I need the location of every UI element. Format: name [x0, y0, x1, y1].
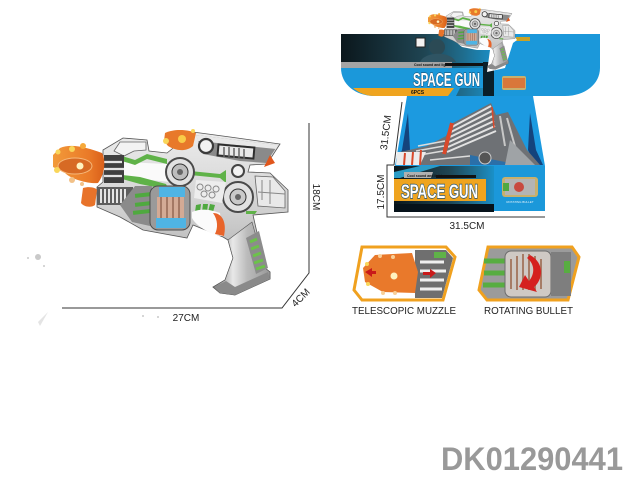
display box	[341, 7, 600, 212]
front title: SPACE GUN	[401, 182, 478, 203]
dust specks	[27, 254, 159, 326]
callout rotate arrow	[519, 255, 541, 292]
header background	[341, 34, 600, 96]
dimension lines: gun	[62, 123, 309, 308]
header grey band	[341, 62, 452, 68]
dimension lines: box	[387, 102, 545, 217]
callout frame	[479, 247, 579, 300]
header age badge	[516, 37, 530, 41]
stacked guns	[396, 103, 540, 165]
header logo	[416, 38, 425, 47]
front yellow band	[394, 179, 486, 201]
callout: rotating bullet	[479, 247, 579, 300]
callout: telescopic muzzle	[354, 247, 455, 300]
header astronaut	[420, 39, 456, 62]
front tagline	[404, 172, 476, 178]
front inset image	[502, 177, 538, 197]
callout rods	[483, 261, 505, 285]
dimension: box height: 17.5CM	[376, 174, 387, 210]
header title: SPACE GUN	[413, 70, 480, 90]
header dark panel	[341, 34, 494, 96]
header card	[341, 34, 600, 96]
callout muzzle	[363, 253, 418, 293]
callout label: rotating bullet: ROTATING BULLET	[484, 305, 574, 317]
mini gun on header	[427, 7, 517, 72]
callout label: telescopic muzzle: TELESCOPIC MUZZLE	[352, 305, 456, 317]
header small black label	[445, 63, 483, 66]
front tagline: Cool sound and light	[407, 174, 443, 178]
front inset caption: ROTATING BULLET	[506, 200, 534, 204]
product code: DK01290441	[441, 441, 623, 477]
dimension: 27CM: 27CM	[173, 313, 199, 324]
callout frame	[354, 247, 455, 300]
callout arrows	[365, 268, 376, 277]
main toy gun	[53, 129, 288, 295]
header tagline: Cool sound and light	[414, 63, 450, 67]
callout barrel	[415, 250, 453, 298]
callout rear	[551, 252, 571, 296]
dimension: 4CM: 4CM	[290, 287, 313, 310]
dimension: box width: 31.5CM	[449, 221, 485, 232]
callout sparkles	[365, 254, 398, 295]
box inner shadows	[396, 113, 543, 165]
dimension: box depth: 31.5CM	[379, 115, 394, 151]
box front panel	[394, 166, 545, 212]
callout cylinder	[505, 251, 551, 297]
header pack text: 6PCS	[411, 90, 425, 96]
header yellow band	[353, 88, 454, 96]
dimension: 18CM: 18CM	[310, 184, 321, 210]
header inset image	[502, 76, 526, 90]
box interior	[395, 96, 545, 166]
